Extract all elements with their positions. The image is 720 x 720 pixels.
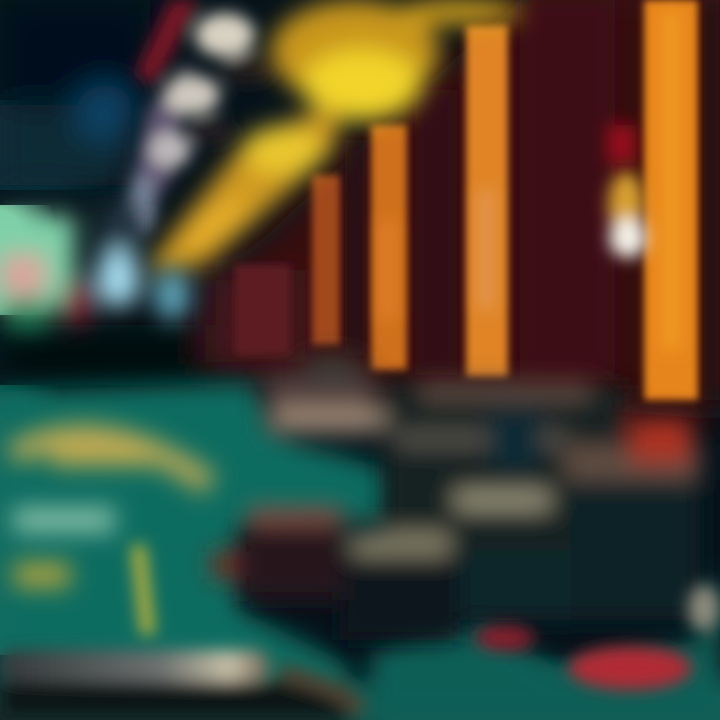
background: dark ceiling and walls: [0, 0, 720, 420]
panel: banner garlands: [120, 0, 276, 235]
icon: chandelier lights: [150, 0, 522, 275]
table markings: [12, 436, 210, 575]
panel: left wall mural: [0, 205, 190, 330]
icon: table line: [138, 545, 148, 635]
panel: green table felt: [0, 382, 720, 720]
panel: column highlights: [381, 10, 680, 350]
icon: side lamp: [608, 171, 647, 258]
icon: red chips: [475, 584, 720, 690]
panel: foreground roulette rim: [0, 650, 362, 720]
panel: stacks of chips: [212, 355, 700, 640]
panel: curtains: [345, 0, 720, 400]
panel: orange columns: [235, 0, 698, 400]
